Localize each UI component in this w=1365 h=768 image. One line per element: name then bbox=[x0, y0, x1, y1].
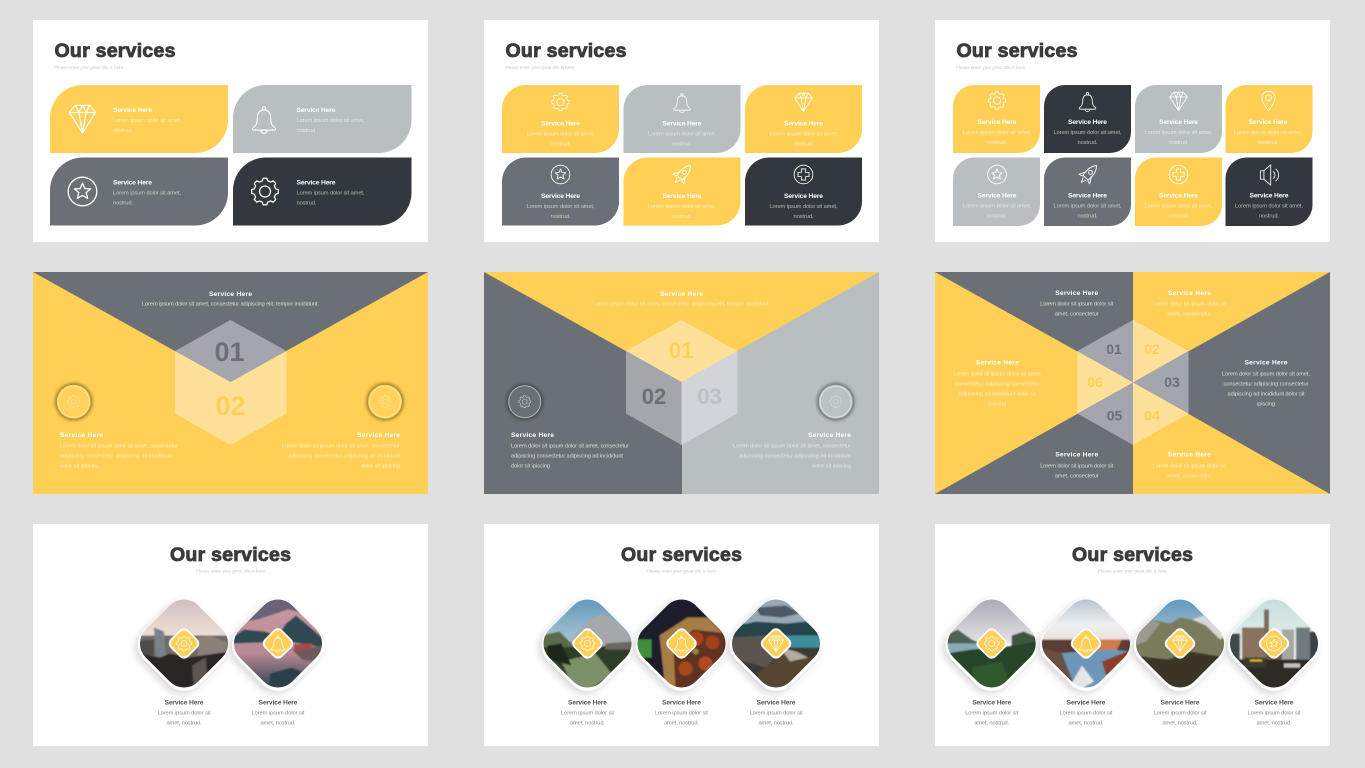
text block: service 1: amet, nostrud. bbox=[570, 720, 605, 726]
text block: service 6 bbox=[953, 360, 1042, 408]
text block: Service Here bbox=[978, 119, 1017, 126]
heading: Our services bbox=[506, 40, 627, 62]
text block bbox=[1234, 119, 1302, 146]
text block: service 1 bbox=[158, 700, 211, 726]
text block: nostrud. bbox=[672, 142, 692, 148]
hexagon with numbers bbox=[1077, 320, 1188, 445]
text block: nostrud. bbox=[550, 214, 571, 220]
panel: slide 5, three-step hexagon bbox=[484, 272, 879, 494]
card: grey star bbox=[953, 158, 1040, 226]
panel: slide 6, six-step hexagon bbox=[935, 272, 1330, 494]
text block: service 3: ipiscing bbox=[1257, 402, 1275, 408]
text block: service 3 bbox=[1222, 360, 1310, 408]
text block: service 2: Service Here bbox=[1066, 700, 1106, 706]
icon: plus bbox=[794, 165, 813, 184]
icon: rocket bbox=[1076, 161, 1102, 187]
text block: Lorem ipsum dolor sit amet, bbox=[648, 132, 716, 138]
text block: Service Here bbox=[1159, 192, 1198, 200]
text block: service 4: Lorem ipsum dolor sit bbox=[1248, 710, 1301, 716]
icon badge bbox=[974, 626, 1009, 661]
text block: service 1: Service Here bbox=[568, 700, 607, 706]
text block: Service Here bbox=[662, 193, 702, 200]
icon badge bbox=[1256, 626, 1292, 661]
text block: right service: dolor sit ipiscing bbox=[361, 464, 400, 470]
text block bbox=[770, 193, 838, 220]
text block: service 3: Lorem ipsum dolor sit bbox=[750, 710, 803, 716]
text block: service 1 bbox=[561, 700, 614, 726]
text block: nostrud. bbox=[794, 142, 814, 148]
text block bbox=[770, 120, 838, 148]
text block: service 3: amet, nostrud. bbox=[1162, 720, 1198, 726]
photo diamond: misty forest bbox=[940, 600, 1036, 696]
icon: gem bbox=[795, 93, 812, 112]
text block: Lorem ipsum dolor sit amet, bbox=[1234, 130, 1302, 136]
text block: service 4 bbox=[1153, 452, 1226, 480]
text block: nostrud. bbox=[987, 214, 1007, 220]
subtitle: Please enter your great title is here bbox=[54, 65, 123, 70]
text block bbox=[113, 180, 181, 206]
text block: Lorem ipsum dolor sit amet, bbox=[963, 130, 1031, 136]
text block: right service: dolor sit ipiscing bbox=[812, 464, 851, 470]
text block: service 3: consectetur adipiscing consectetur bbox=[1224, 382, 1309, 388]
text block: Service Here bbox=[784, 193, 823, 200]
text block: Lorem ipsum dolor sit amet, bbox=[1144, 130, 1213, 136]
text block: top service: Lorem ipsum dolor sit amet, consectetur adipiscing elit, tempor incididunt. bbox=[593, 302, 770, 308]
icon: gem bbox=[1170, 92, 1187, 111]
card: grey bell bbox=[624, 85, 740, 153]
photo diamond: city street bbox=[1223, 600, 1320, 696]
text block: Service Here bbox=[541, 193, 580, 200]
text block: service 1: Service Here bbox=[972, 700, 1011, 706]
text block: service 4: Lorem dolor sit ipsum dolor sit bbox=[1153, 464, 1226, 470]
text block: service 4: amet, nostrud. bbox=[1256, 720, 1292, 726]
text block: service 4: amet, consectetur bbox=[1167, 474, 1211, 480]
text block: left service: dolor sit ipiscing bbox=[60, 464, 99, 470]
panel: slide 1, four services bbox=[33, 20, 428, 242]
icon badge bbox=[1162, 626, 1198, 661]
card: yellow plus bbox=[1135, 158, 1222, 226]
icon: bell bbox=[674, 94, 690, 113]
icon badge bbox=[260, 626, 296, 661]
text block: right service bbox=[282, 432, 400, 470]
photo diamond: lake and mountains bbox=[227, 600, 324, 696]
text block bbox=[648, 120, 716, 148]
text block: nostrud. bbox=[1078, 214, 1098, 220]
icon: gear bbox=[252, 178, 278, 205]
icon: left gear badge bbox=[507, 384, 543, 420]
text block: Service Here bbox=[1068, 192, 1107, 200]
icon badge bbox=[664, 626, 699, 661]
icon: plus bbox=[1169, 165, 1188, 184]
text block: nostrud. bbox=[672, 214, 692, 220]
text block: service 1: amet, nostrud. bbox=[974, 720, 1010, 726]
text block: service 2: Service Here bbox=[1168, 290, 1211, 297]
text block: nostrud. bbox=[1168, 214, 1189, 220]
text block: nostrud. bbox=[1258, 140, 1278, 146]
text block bbox=[296, 180, 365, 206]
photo diamond: canal town bbox=[1035, 600, 1132, 696]
icon: gem bbox=[69, 105, 96, 133]
text block: service 1: amet, consectetur bbox=[1055, 312, 1099, 318]
text block: right service: adipiscing consectetur adipiscing ad incididunt bbox=[288, 454, 400, 460]
text block: service 3 bbox=[1154, 700, 1207, 726]
text block: service 2 bbox=[1153, 290, 1226, 318]
text block: top service: Service Here bbox=[660, 291, 703, 298]
text block: service 1: Service Here bbox=[1055, 290, 1098, 297]
text block: service 6: Service Here bbox=[976, 360, 1019, 366]
icon badge bbox=[758, 626, 794, 661]
text block: service 3: amet, nostrud. bbox=[758, 720, 794, 726]
icon badge bbox=[1068, 626, 1104, 661]
text block: service 6: ipiscing bbox=[988, 402, 1006, 408]
icon: left gear badge bbox=[55, 383, 92, 420]
left yellow triangle bbox=[935, 272, 1133, 494]
text block: left service bbox=[511, 432, 629, 470]
photo diamond: alpine valley bbox=[536, 600, 633, 696]
text block: service 1: Lorem ipsum dolor sit bbox=[158, 710, 211, 716]
text block bbox=[1235, 192, 1303, 220]
text block: left service bbox=[60, 432, 178, 470]
hexagon with numbers: 06 bbox=[1087, 374, 1103, 390]
icon: bell bbox=[1079, 93, 1096, 112]
subtitle: Please enter your great title is here bbox=[505, 65, 574, 70]
text block: service 6: consectetur adipiscing consectetur bbox=[955, 382, 1040, 388]
hexagon with numbers: 04 bbox=[1144, 408, 1160, 424]
text block: service 2 bbox=[252, 700, 305, 726]
photo diamond: city skyline bbox=[132, 600, 230, 696]
card: mid grey service bbox=[50, 158, 228, 226]
text block: service 2: Lorem dolor sit ipsum dolor sit bbox=[1153, 302, 1226, 308]
text block: service 1: Lorem ipsum dolor sit bbox=[561, 710, 614, 716]
text block: service 3: Service Here bbox=[1244, 360, 1288, 366]
text block: left service: Lorem dolor sit ipsum dolor sit amet, consectetur bbox=[511, 444, 629, 450]
text block: Service Here bbox=[1159, 119, 1198, 126]
subtitle: Please enter your great title is here bbox=[647, 568, 716, 574]
text block bbox=[526, 193, 595, 220]
heading: Our services bbox=[1072, 544, 1193, 566]
text block bbox=[1144, 192, 1213, 220]
text block: service 1: Service Here bbox=[164, 700, 204, 706]
text block: nostrud. bbox=[1168, 140, 1189, 146]
card: yellow gear bbox=[953, 85, 1040, 153]
text block: service 1 bbox=[965, 700, 1019, 726]
panel: slide 9, four photo diamonds bbox=[935, 524, 1330, 746]
text block: left service: adipiscing consectetur adipiscing ad incididunt bbox=[60, 454, 172, 460]
text block: service 3 bbox=[750, 700, 803, 726]
text block: Service Here bbox=[1068, 119, 1107, 126]
icon: right gear badge bbox=[817, 383, 854, 420]
text block: nostrud. bbox=[113, 128, 133, 134]
text block: service 6: adipiscing ad incididunt dolor sit bbox=[959, 392, 1036, 398]
text block: left service: Service Here bbox=[511, 432, 554, 439]
icon badge bbox=[166, 626, 202, 661]
text block: service 3: Lorem dolor sit ipsum dolor sit amet, bbox=[1222, 372, 1310, 378]
card: yellow rocket bbox=[624, 158, 740, 226]
text block: service 3: adipiscing ad incididunt dolor sit bbox=[1228, 392, 1305, 398]
text block: Lorem ipsum dolor sit amet, bbox=[963, 204, 1031, 210]
text block: top service bbox=[593, 291, 770, 308]
card: yellow gem bbox=[745, 85, 862, 153]
text block: service 1: amet, nostrud. bbox=[166, 720, 202, 726]
card: yellow pin bbox=[1226, 85, 1312, 153]
icon: right gear badge bbox=[366, 383, 404, 420]
card: dark speaker bbox=[1226, 158, 1312, 226]
photo diamond: mountain lake bbox=[725, 600, 822, 696]
icon: speaker bbox=[1260, 165, 1279, 185]
text block bbox=[113, 107, 181, 134]
hexagon with numbers: 01 bbox=[1106, 341, 1122, 357]
hexagon with numbers: 03 bbox=[1164, 374, 1180, 390]
subtitle: Please enter your great title is here bbox=[956, 65, 1025, 70]
text block: right service: adipiscing consectetur adipiscing ad incididunt bbox=[739, 454, 851, 460]
text block: Lorem ipsum dolor sit amet, bbox=[770, 204, 838, 210]
text block: Service Here bbox=[784, 120, 823, 128]
text block: Lorem ipsum dolor sit amet, bbox=[113, 118, 181, 124]
text block bbox=[963, 119, 1031, 146]
text block: nostrud. bbox=[113, 200, 133, 206]
text block: service 5: Lorem dolor sit ipsum dolor sit bbox=[1040, 464, 1114, 470]
text block: Service Here bbox=[978, 192, 1017, 200]
icon: rocket bbox=[670, 161, 696, 187]
card: dark bell bbox=[1044, 85, 1131, 153]
text block: right service: Service Here bbox=[808, 432, 851, 439]
text block: top service bbox=[142, 291, 319, 308]
card: light grey service bbox=[233, 85, 412, 153]
text block: nostrud. bbox=[794, 214, 814, 220]
heading: Our services bbox=[621, 544, 742, 566]
text block: Lorem ipsum dolor sit amet, bbox=[113, 190, 181, 196]
text block: service 1: Lorem ipsum dolor sit bbox=[965, 710, 1019, 716]
text block: service 2: amet, nostrud. bbox=[664, 720, 699, 726]
text block: service 2: Service Here bbox=[258, 700, 298, 706]
text block bbox=[526, 120, 595, 148]
text block: Lorem ipsum dolor sit amet, bbox=[770, 132, 838, 138]
text block: right service: Service Here bbox=[357, 432, 400, 439]
text block: service 2: amet, nostrud. bbox=[1068, 720, 1104, 726]
icon: gear bbox=[988, 92, 1006, 109]
text block: service 4: Service Here bbox=[1168, 452, 1211, 458]
text block: nostrud. bbox=[296, 200, 317, 206]
text block: service 2: amet, consectetur bbox=[1167, 312, 1211, 318]
card: yellow gear bbox=[502, 85, 619, 153]
text block: service 2: amet, nostrud. bbox=[260, 720, 296, 726]
text block: service 2: Service Here bbox=[662, 700, 701, 706]
text block: Service Here bbox=[1248, 119, 1288, 126]
icon: star bbox=[551, 165, 570, 184]
text block bbox=[1054, 192, 1122, 220]
hexagon with numbers: 03 bbox=[697, 384, 722, 409]
text block bbox=[1144, 119, 1213, 146]
text block: Service Here bbox=[296, 180, 336, 186]
right grey triangle bbox=[1133, 272, 1330, 494]
text block: nostrud. bbox=[296, 128, 317, 134]
text block: service 5: Service Here bbox=[1055, 452, 1098, 458]
hexagon with numbers: 02 bbox=[215, 391, 246, 421]
text block: service 6: Lorem dolor sit ipsum dolor sit amet, bbox=[953, 372, 1042, 378]
card: grey gem bbox=[1135, 85, 1222, 153]
hexagon with numbers: 01 bbox=[669, 338, 693, 363]
subtitle: Please enter your great title is here bbox=[196, 568, 265, 574]
icon: star bbox=[988, 165, 1006, 184]
hexagon with numbers: 01 bbox=[214, 337, 245, 367]
card: dark plus bbox=[745, 158, 862, 226]
panel: slide 2, six services bbox=[484, 20, 879, 242]
text block bbox=[1054, 119, 1122, 146]
hexagon with numbers bbox=[175, 320, 286, 445]
text block: top service: Service Here bbox=[209, 291, 252, 298]
text block: Lorem ipsum dolor sit amet, bbox=[526, 132, 595, 138]
text block: service 2: Lorem ipsum dolor sit bbox=[655, 710, 708, 716]
hexagon with numbers: 05 bbox=[1107, 408, 1122, 424]
text block: service 2 bbox=[655, 700, 708, 726]
card: yellow service bbox=[50, 85, 228, 153]
top grey triangle bbox=[33, 272, 428, 382]
card: dark service bbox=[233, 158, 412, 226]
text block: service 2: Lorem ipsum dolor sit bbox=[1060, 710, 1113, 716]
card: mid grey star bbox=[502, 158, 619, 226]
panel: slide 4, yellow two-step hexagon bbox=[33, 272, 428, 494]
text block: left service: Lorem dolor sit ipsum dolor sit amet, consectetur bbox=[60, 444, 178, 450]
text block: Service Here bbox=[662, 120, 702, 128]
photo diamond: pizza bbox=[630, 600, 726, 696]
text block: service 3: Lorem ipsum dolor sit bbox=[1154, 710, 1207, 716]
text block bbox=[963, 192, 1031, 220]
text block: Lorem ipsum dolor sit amet, bbox=[296, 118, 365, 124]
panel: slide 3, eight services bbox=[935, 20, 1330, 242]
hexagon with numbers: 02 bbox=[1144, 341, 1160, 357]
text block: Service Here bbox=[113, 107, 152, 114]
icon: star bbox=[68, 177, 97, 206]
hexagon with numbers: 02 bbox=[642, 384, 666, 409]
heading: Our services bbox=[956, 40, 1078, 62]
text block: service 1: Lorem dolor sit ipsum dolor sit bbox=[1040, 302, 1114, 308]
text block: service 1 bbox=[1040, 290, 1114, 318]
photo diamond: snowy peak bbox=[1129, 600, 1226, 696]
panel: slide 8, three photo diamonds bbox=[484, 524, 879, 746]
heading: Our services bbox=[170, 544, 291, 566]
text block: service 5 bbox=[1040, 452, 1114, 480]
text block: top service: Lorem ipsum dolor sit amet, consectetur adipiscing elit, tempor incididunt. bbox=[142, 302, 319, 308]
top yellow triangle bbox=[484, 272, 879, 382]
text block: left service: Service Here bbox=[60, 432, 103, 439]
text block: Service Here bbox=[1250, 192, 1289, 200]
text block: service 4 bbox=[1248, 700, 1301, 726]
subtitle: Please enter your great title is here bbox=[1098, 568, 1167, 574]
text block: nostrud. bbox=[1078, 140, 1098, 146]
text block: Lorem ipsum dolor sit amet, bbox=[1144, 204, 1213, 210]
text block: Lorem ipsum dolor sit amet, bbox=[1054, 130, 1122, 136]
text block: service 5: amet, consectetur bbox=[1055, 474, 1099, 480]
icon: gear bbox=[552, 93, 569, 111]
text block: Service Here bbox=[113, 180, 152, 186]
text block: service 2 bbox=[1060, 700, 1113, 726]
text block: Service Here bbox=[541, 120, 580, 128]
text block: left service: adipiscing consectetur adipiscing ad incididunt bbox=[511, 454, 623, 460]
text block: right service: Lorem dolor sit ipsum dolor sit amet, consectetur bbox=[733, 444, 851, 450]
text block: left service: dolor sit ipiscing bbox=[511, 464, 550, 470]
text block: service 4: Service Here bbox=[1254, 700, 1294, 706]
text block: right service bbox=[733, 432, 851, 470]
text block: service 3: Service Here bbox=[1160, 700, 1200, 706]
text block: Service Here bbox=[296, 107, 336, 114]
text block: Lorem ipsum dolor sit amet, bbox=[1054, 204, 1122, 210]
panel: slide 7, two photo diamonds bbox=[33, 524, 428, 746]
text block: service 3: Service Here bbox=[756, 700, 796, 706]
text block: Lorem ipsum dolor sit amet, bbox=[526, 204, 595, 210]
text block: Lorem ipsum dolor sit amet, bbox=[648, 204, 716, 210]
text block bbox=[296, 107, 365, 134]
text block: Lorem ipsum dolor sit amet, bbox=[1235, 204, 1303, 210]
text block: nostrud. bbox=[550, 142, 571, 148]
heading: Our services bbox=[54, 40, 176, 62]
hexagon with numbers bbox=[626, 320, 738, 445]
text block: service 2: Lorem ipsum dolor sit bbox=[252, 710, 305, 716]
icon: map pin bbox=[1262, 91, 1275, 111]
icon: bell bbox=[252, 107, 276, 133]
card: mid grey rocket bbox=[1044, 158, 1131, 226]
icon badge bbox=[570, 626, 605, 661]
text block: Lorem ipsum dolor sit amet, bbox=[296, 190, 365, 196]
text block: nostrud. bbox=[1259, 214, 1279, 220]
text block: nostrud. bbox=[987, 140, 1007, 146]
text block: right service: Lorem dolor sit ipsum dolor sit amet, consectetur bbox=[282, 444, 400, 450]
text block bbox=[648, 193, 716, 220]
